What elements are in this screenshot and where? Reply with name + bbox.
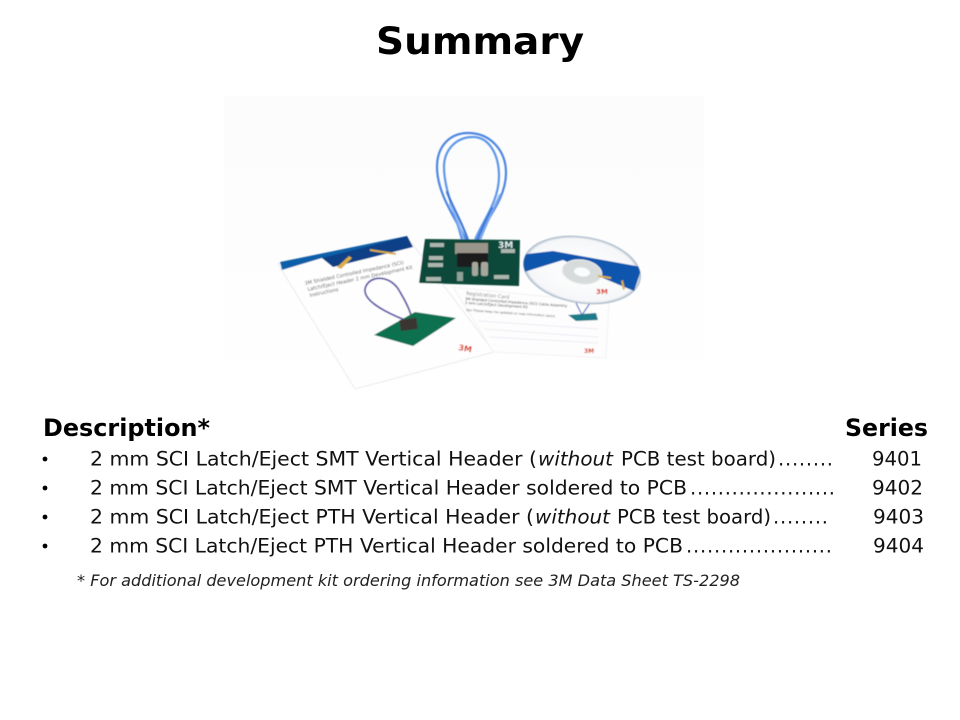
blue cable loop: [437, 133, 506, 240]
CD: [522, 235, 642, 305]
row 9404: .....................: [686, 534, 832, 558]
instruction booklet: 3M: [458, 343, 473, 354]
CD: 3M: [596, 288, 608, 296]
row 9404: 9404: [873, 534, 924, 558]
registration card: Registration Card: [466, 291, 510, 301]
table header: Description: Description*: [43, 414, 210, 442]
title: Summary: [376, 20, 584, 63]
row 9404: [43, 534, 924, 558]
product photo: development kit: [278, 131, 642, 390]
row 9403: PCB test board): [617, 506, 771, 528]
row 9403: without: [535, 506, 611, 528]
instruction booklet: 3M Shielded Controlled Impedance (SCI): [304, 260, 404, 287]
row 9401: without: [538, 448, 614, 470]
green test board: 3M: [498, 241, 513, 251]
row 9401: ........: [778, 448, 833, 470]
table header: Series: Series: [845, 414, 928, 442]
row 9402: [43, 476, 923, 500]
row 9403: [43, 506, 924, 528]
instruction booklet: Instructions: [309, 287, 340, 299]
row 9402: 9402: [872, 476, 923, 500]
row 9401: [43, 448, 922, 470]
green test board: [419, 239, 520, 286]
row 9401: PCB test board): [621, 448, 776, 470]
row 9404: 2 mm SCI Latch/Eject PTH Vertical Header soldered to PCB: [90, 534, 683, 558]
row 9401: 9401: [872, 448, 922, 470]
registration card: 3M Shielded Controlled Impedance (SCI) Cable Assembly: [465, 297, 568, 308]
row 9402: 2 mm SCI Latch/Eject SMT Vertical Header soldered to PCB: [90, 476, 687, 500]
row 9403: 2 mm SCI Latch/Eject PTH Vertical Header (: [90, 506, 534, 528]
registration card: 2 mm Latch/Eject Development Kit: [465, 301, 528, 309]
footnote: * For additional development kit ordering information see 3M Data Sheet TS-2298: [77, 571, 740, 590]
row 9402: .....................: [690, 476, 835, 500]
row 9401: 2 mm SCI Latch/Eject SMT Vertical Header (: [90, 448, 537, 470]
registration card: [453, 287, 609, 358]
registration card: Yes! Please keep me updated on new information about: [466, 308, 556, 318]
row 9403: ........: [773, 506, 828, 528]
instruction booklet: Latch/Eject Header 2 mm Development Kit: [307, 265, 413, 293]
instruction booklet: [278, 236, 494, 389]
row 9403: 9403: [873, 506, 924, 528]
registration card: 3M: [584, 348, 594, 355]
